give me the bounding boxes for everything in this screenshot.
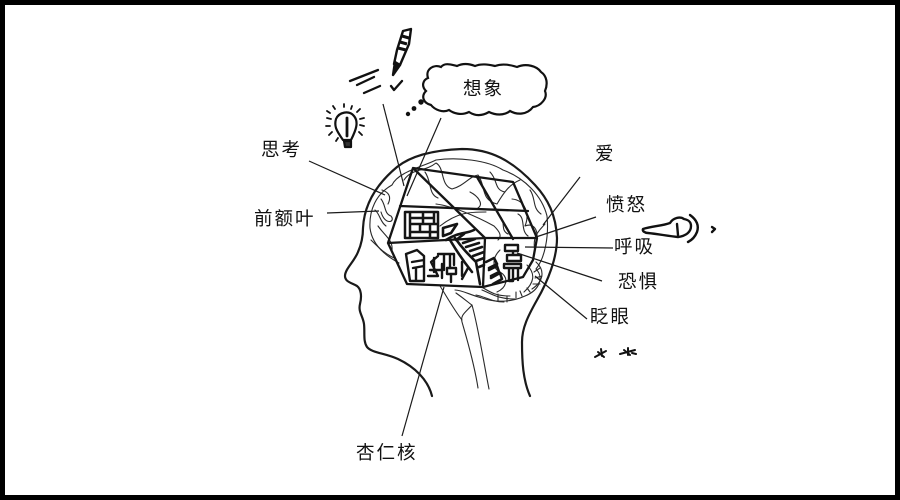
bookshelf room xyxy=(405,212,438,238)
label: 呼吸: 呼吸 xyxy=(614,236,655,257)
brain xyxy=(370,159,548,389)
leader lines xyxy=(309,104,613,436)
icon: thought bubble dots xyxy=(406,99,424,116)
label: 恐惧: 恐惧 xyxy=(618,271,659,292)
label: 眨眼: 眨眼 xyxy=(590,306,631,327)
house in brain xyxy=(388,168,537,287)
furniture room xyxy=(406,250,468,282)
icon: notes and check mark xyxy=(350,70,402,93)
label: 愤怒: 愤怒 xyxy=(606,194,647,215)
thought cloud xyxy=(423,64,547,115)
label: 想象: 想象 xyxy=(463,78,504,99)
desk room xyxy=(504,245,521,281)
house frame xyxy=(388,168,537,287)
icon: light bulb xyxy=(326,104,364,147)
icon: pointing hand xyxy=(643,215,715,242)
icon: pencil xyxy=(393,29,411,75)
label: 思考: 思考 xyxy=(261,139,302,160)
label: 前额叶: 前额叶 xyxy=(254,208,316,229)
label: 杏仁核: 杏仁核 xyxy=(356,442,418,463)
staircase xyxy=(443,224,502,284)
head outline xyxy=(345,149,557,396)
decorative ink marks xyxy=(595,348,636,357)
label: 爱: 爱 xyxy=(595,143,616,164)
